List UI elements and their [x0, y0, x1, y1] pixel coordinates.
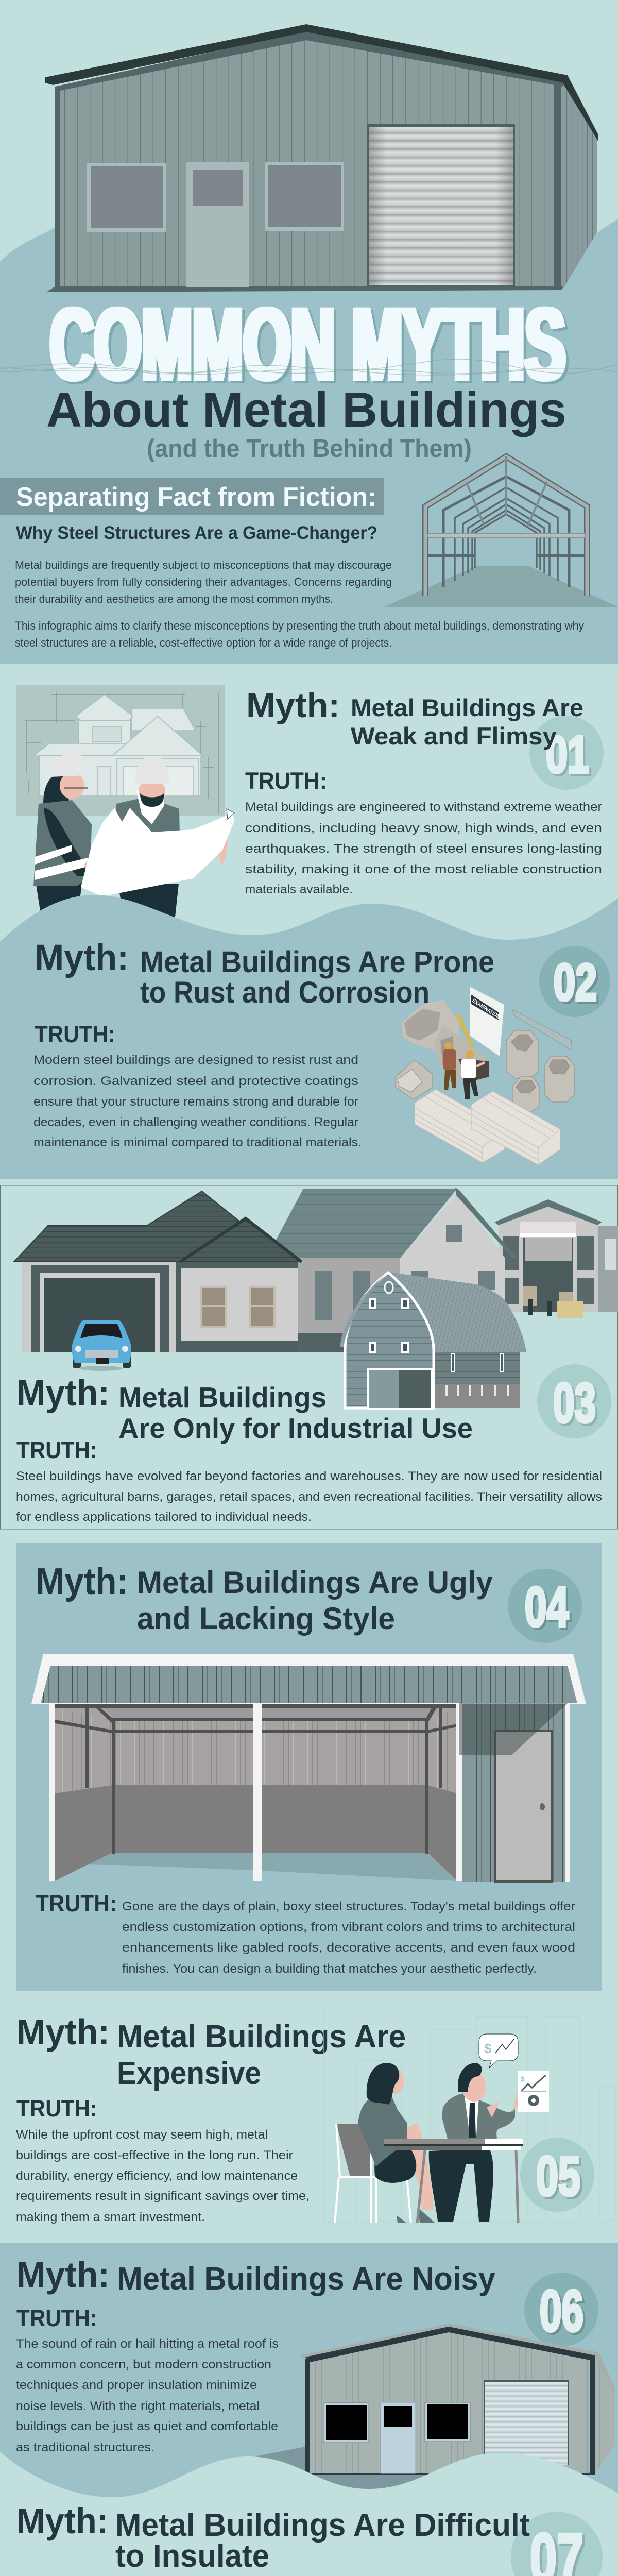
panel: myth 6 [0, 2243, 618, 2527]
illustration: metal building [45, 24, 598, 292]
badge: number 06: 06 [540, 2279, 583, 2343]
exam sheet [456, 987, 504, 1056]
banner: separating fact from fiction: Separating Fact from Fiction: [16, 482, 376, 512]
exam sheet: EXAMINATION [471, 997, 501, 1020]
badge: number 04: 04 [525, 1575, 569, 1638]
heading: truth 1: TRUTH: [245, 768, 327, 794]
badge: number 06: 06 [542, 2281, 586, 2345]
speech bubble [479, 2034, 518, 2068]
badge: number 03: 03 [553, 1371, 596, 1434]
heading: myth 5: Expensive [117, 2056, 261, 2091]
subtitle: (and the Truth Behind Them) [147, 435, 472, 463]
heading: myth 5: Myth: [16, 2012, 110, 2052]
illustration: steel frame [384, 456, 618, 607]
heading: myth 6: Myth: [16, 2255, 110, 2295]
heading: myth 2: to Rust and Corrosion [140, 976, 430, 1009]
text block: truth 6 [16, 2337, 279, 2454]
text block: introduction: their durability and aesthetics are among the most common myths. [15, 592, 333, 605]
heading: myth 5: Metal Buildings Are [117, 2019, 406, 2055]
panel: hero and introduction [0, 24, 618, 664]
text block: truth 2: ensure that your structure remains strong and durable for [33, 1095, 358, 1109]
text block: introduction: This infographic aims to clarify these misconceptions by presenting the truth about metal buildings, demonstrating why [15, 619, 584, 632]
wave divider [0, 2452, 618, 2527]
figure: man [429, 2063, 520, 2222]
heading: myth 1: Weak and Flimsy [351, 722, 557, 750]
text block: truth 6: techniques and proper insulation minimize [16, 2378, 257, 2392]
text block: truth 2: Modern steel buildings are designed to resist rust and [33, 1053, 358, 1067]
chair [335, 2124, 411, 2223]
badge: number 01: 01 [548, 728, 591, 786]
panel: myth 5 [16, 2004, 615, 2224]
caliper [512, 1010, 572, 1049]
text block: truth 3 [16, 1469, 602, 1524]
text block: truth 5: durability, energy efficiency, and low maintenance [16, 2169, 298, 2183]
heading: why steel structures: Why Steel Structures Are a Game-Changer? [16, 523, 377, 543]
text block: truth 6: noise levels. With the right materials, metal [16, 2399, 260, 2413]
text block: truth 5: making them a smart investment. [16, 2210, 205, 2224]
text block: truth 3: Steel buildings have evolved far beyond factories and warehouses. They are now used for residential [16, 1469, 602, 1483]
heading: myth 7 [16, 2501, 530, 2574]
heading: truth 3: TRUTH: [16, 1437, 97, 1463]
heading: myth 3: Metal Buildings [118, 1381, 327, 1413]
heading: truth 5: TRUTH: [16, 2095, 97, 2122]
badge: number 07 [511, 2512, 603, 2576]
illustration: grey house [266, 1188, 517, 1352]
heading: myth 3: Are Only for Industrial Use [118, 1412, 473, 1444]
badge: number 03 [537, 1364, 611, 1438]
text block: truth 1: conditions, including heavy snow, high winds, and even [245, 821, 602, 835]
badge: number 01: 01 [546, 726, 589, 784]
panel: myth 4 [16, 1543, 602, 1991]
heading: truth 2: TRUTH: [35, 1021, 115, 1047]
illustration: business meeting [323, 2004, 615, 2223]
badge: number 04: 04 [527, 1578, 571, 1640]
heading: myth 5 [16, 2012, 406, 2091]
text block: truth 6: buildings can be just as quiet and comfortable [16, 2419, 278, 2433]
text block: truth 5: While the upfront cost may seem high, metal [16, 2128, 268, 2142]
text block: truth 2: maintenance is minimal compared to traditional materials. [33, 1136, 362, 1149]
title: about metal buildings: About Metal Buildings [46, 382, 566, 437]
text block: truth 4 [122, 1900, 575, 1976]
text block: truth 4: enhancements like gabled roofs, decorative accents, and even faux wood [122, 1941, 575, 1955]
illustration: metal building with roll door [254, 2324, 615, 2499]
figure: woman [358, 2063, 435, 2223]
heading: myth 4: and Lacking Style [137, 1601, 395, 1636]
table [384, 2139, 523, 2223]
text block: truth 5: buildings are cost-effective in the long run. Their [16, 2148, 293, 2162]
text block: truth 6: a common concern, but modern construction [16, 2358, 271, 2371]
board stacks [415, 1089, 505, 1163]
badge: number 06 [524, 2273, 598, 2347]
badge: number 02: 02 [554, 954, 597, 1011]
figure: woman engineer [33, 752, 99, 917]
text block: introduction: potential buyers from fully considering their advantages. Concerns regarding [15, 575, 392, 588]
heading: myth 2: Myth: [35, 938, 129, 978]
chart card: $ [521, 2075, 525, 2083]
heading: myth 3: Myth: [16, 1373, 110, 1414]
wave background [0, 895, 618, 1179]
chart card [518, 2071, 549, 2112]
badge: number 01 [529, 716, 604, 790]
pipe large [402, 999, 459, 1057]
badge: number 03: 03 [555, 1374, 598, 1436]
badge: number 02: 02 [556, 956, 599, 1013]
heading: myth 1: Metal Buildings Are [351, 694, 583, 721]
badge: number 05: 05 [538, 2147, 582, 2209]
heading: myth 7: Myth: [16, 2501, 108, 2541]
heading: myth 4: Myth: [36, 1561, 128, 1602]
text block: truth 2: decades, even in challenging weather conditions. Regular [33, 1115, 358, 1129]
text block: truth 1: stability, making it one of the most reliable construction [245, 862, 602, 876]
text block: truth 2: corrosion. Galvanized steel and protective coatings [33, 1074, 358, 1088]
text block: truth 6: The sound of rain or hail hitting a metal roof is [16, 2337, 279, 2351]
blueprint [81, 808, 234, 896]
heading: myth 7: to Insulate [115, 2538, 269, 2574]
text block: truth 4: finishes. You can design a building that matches your aesthetic perfectly. [122, 1962, 537, 1976]
workers [443, 1042, 485, 1099]
illustration: car [72, 1320, 131, 1371]
illustration: engineers with blueprint [16, 685, 234, 917]
heading: myth 6 [16, 2255, 495, 2297]
illustration: garage house [14, 1191, 301, 1352]
heading: myth 4: Metal Buildings Are Ugly [137, 1565, 493, 1600]
badge: number 05 [520, 2138, 594, 2212]
text block: truth 2 [33, 1053, 362, 1149]
panel: myth 7 [0, 2501, 618, 2576]
text block: introduction: Metal buildings are frequently subject to misconceptions that may discourage [15, 558, 392, 571]
text block: introduction [15, 558, 584, 649]
text block: truth 5: requirements result in significant savings over time, [16, 2189, 310, 2203]
heading: myth 7: Metal Buildings Are Difficult [115, 2507, 530, 2543]
panel: myth 3 [0, 1185, 618, 1529]
text block: truth 4: endless customization options, from vibrant colors and trims to architectural [122, 1920, 575, 1934]
badge: number 05: 05 [536, 2145, 580, 2207]
figure: man engineer [116, 756, 228, 917]
text block: truth 1: materials available. [245, 883, 353, 896]
text block: introduction: steel structures are a reliable, cost-effective option for a wide range of projects. [15, 636, 392, 649]
badge: number 04 [508, 1569, 582, 1643]
text block: truth 1: earthquakes. The strength of steel ensures long-lasting [245, 842, 602, 856]
panel: myth 2 [0, 895, 618, 1179]
illustration: warehouse [494, 1199, 618, 1318]
panel: myth 1 [16, 685, 604, 917]
illustration: open metal shed [31, 1654, 586, 1882]
heading: myth 1 [246, 686, 604, 790]
text block: truth 6: as traditional structures. [16, 2441, 154, 2454]
heading: myth 1: Myth: [246, 686, 340, 725]
text block: truth 3: for endless applications tailored to individual needs. [16, 1510, 312, 1524]
heading: myth 3 [16, 1373, 473, 1444]
heading: myth 4 [36, 1561, 493, 1636]
illustration: isometric steel materials [396, 987, 574, 1165]
heading: truth 6: TRUTH: [16, 2305, 97, 2331]
heading: myth 2 [35, 938, 494, 1009]
heading: truth 4: TRUTH: [36, 1890, 117, 1917]
hex columns [396, 1030, 574, 1112]
heading: myth 6: Metal Buildings Are Noisy [117, 2261, 495, 2297]
badge: number 02 [539, 946, 610, 1017]
text block: truth 5 [16, 2128, 310, 2224]
hero hill background [0, 219, 618, 664]
illustration: barn [340, 1272, 526, 1409]
heading: myth 2: Metal Buildings Are Prone [140, 945, 494, 979]
text block: truth 3: homes, agricultural barns, garages, retail spaces, and even recreational facilities. Their versatility allows [16, 1490, 602, 1504]
text block: truth 1 [245, 800, 602, 896]
speech bubble: $ [484, 2041, 492, 2056]
text block: truth 4: Gone are the days of plain, boxy steel structures. Today's metal buildings offer [122, 1900, 575, 1913]
text block: truth 1: Metal buildings are engineered to withstand extreme weather [245, 800, 602, 814]
